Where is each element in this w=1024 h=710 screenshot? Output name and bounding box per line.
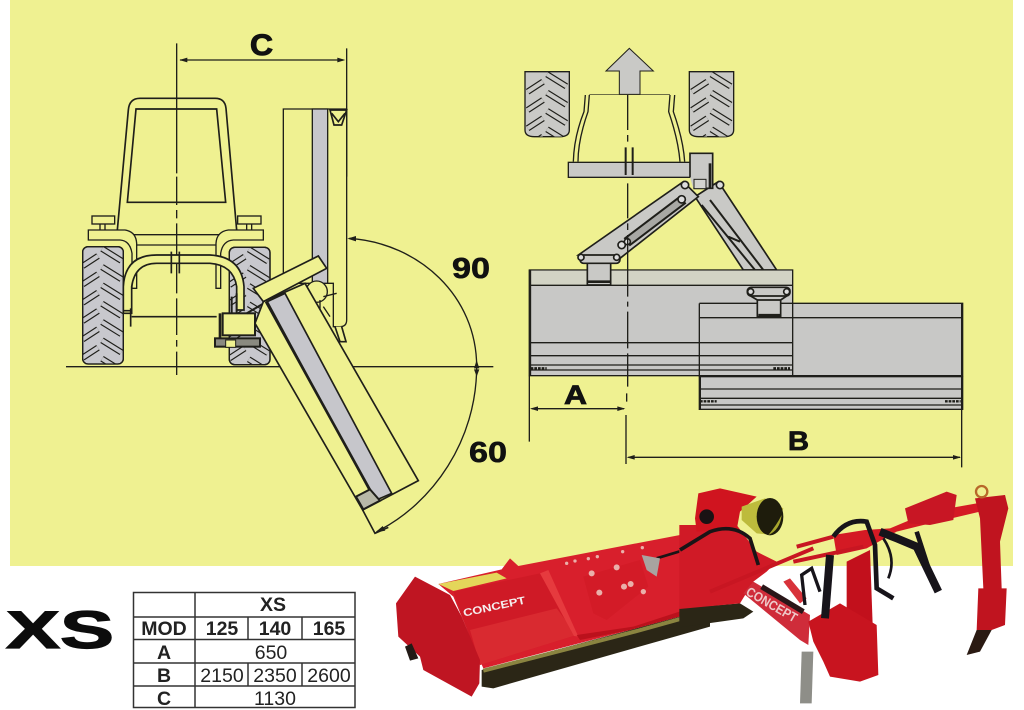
body side plate	[583, 560, 648, 620]
table header row: XS	[260, 594, 286, 616]
rear roller brush	[482, 608, 710, 688]
table header row: 140	[259, 618, 291, 640]
hook ring	[976, 486, 987, 497]
row B: 2600	[307, 665, 351, 687]
wheel	[405, 643, 418, 661]
body front hood	[453, 573, 577, 665]
row B: 2350	[253, 665, 297, 687]
arm and hitch section	[679, 486, 1008, 703]
hitch bracket	[215, 293, 267, 347]
label B: B	[788, 426, 809, 456]
body top	[438, 523, 710, 668]
body logo: CONCEPT	[462, 595, 527, 620]
ground line	[66, 365, 493, 369]
table grid	[134, 592, 355, 708]
hitch plate	[808, 603, 878, 682]
side lower body	[679, 525, 777, 609]
hook arm	[975, 495, 1008, 630]
right tyre	[228, 246, 271, 366]
PTO yellow cone	[742, 498, 783, 535]
row A: A	[157, 642, 171, 664]
rotation arc	[347, 236, 479, 533]
gearbox dial	[699, 509, 714, 524]
top bracket	[905, 492, 957, 525]
support stand	[800, 652, 813, 703]
extended mower deck	[699, 303, 963, 409]
front axle arch	[123, 252, 244, 327]
pivot heads	[578, 254, 790, 317]
row B	[157, 665, 351, 687]
hood lower face	[470, 608, 577, 665]
hood rib	[540, 570, 578, 637]
hydraulic hoses	[802, 521, 938, 618]
hydraulic hose on body	[680, 529, 758, 565]
lower body strip	[577, 602, 710, 640]
main tube	[833, 495, 1007, 555]
photo illustration: red flail mower	[396, 486, 1008, 703]
row C: 1130	[254, 688, 296, 710]
row C: C	[157, 688, 171, 710]
bracket and hose	[642, 533, 710, 577]
cylinder	[762, 578, 807, 612]
tractor cab	[117, 98, 237, 245]
direction arrow	[606, 48, 653, 94]
centre line	[626, 95, 628, 464]
brush end	[679, 603, 753, 627]
yellow background panel	[10, 0, 1013, 566]
row A: 650	[255, 642, 287, 664]
row B: 2150	[200, 665, 244, 687]
table header row: MOD	[141, 618, 187, 640]
model name XS: XS	[6, 601, 114, 660]
table header row: 165	[313, 618, 345, 640]
gearbox	[695, 488, 757, 532]
tilted mower position	[253, 256, 418, 533]
dimensions table	[134, 592, 355, 710]
label C: C	[250, 29, 273, 62]
label 60: 60	[469, 437, 507, 469]
lower side arm with logo	[743, 582, 810, 645]
dimension lines A and B	[529, 376, 962, 467]
left tyre	[82, 246, 124, 365]
label 90: 90	[452, 253, 490, 285]
row A	[157, 642, 287, 664]
drawbar	[568, 147, 713, 189]
main mower deck	[529, 270, 793, 376]
right rear tyre	[688, 71, 734, 138]
dimension C line	[179, 48, 347, 177]
top view diagram: mower offset	[525, 48, 963, 467]
upright mower position	[283, 109, 347, 342]
left rear tyre	[524, 71, 570, 138]
centre line	[175, 43, 179, 375]
bolts	[565, 546, 646, 596]
upright post	[847, 550, 873, 625]
row C	[157, 688, 296, 710]
front view diagram: tractor with mower	[66, 43, 493, 533]
hook blade	[967, 630, 992, 655]
tractor rear outline	[573, 94, 685, 162]
table header row	[141, 594, 345, 640]
linkage arms	[578, 181, 777, 270]
table header row: 125	[206, 618, 238, 640]
row B: B	[157, 665, 171, 687]
arm logo: CONCEPT	[743, 584, 800, 625]
tractor lights and fenders	[88, 216, 263, 288]
yellow warning patch	[438, 573, 507, 591]
label A: A	[564, 380, 587, 410]
mower section	[396, 523, 710, 697]
diagonal rods	[710, 537, 863, 592]
mower end plate	[396, 577, 480, 697]
